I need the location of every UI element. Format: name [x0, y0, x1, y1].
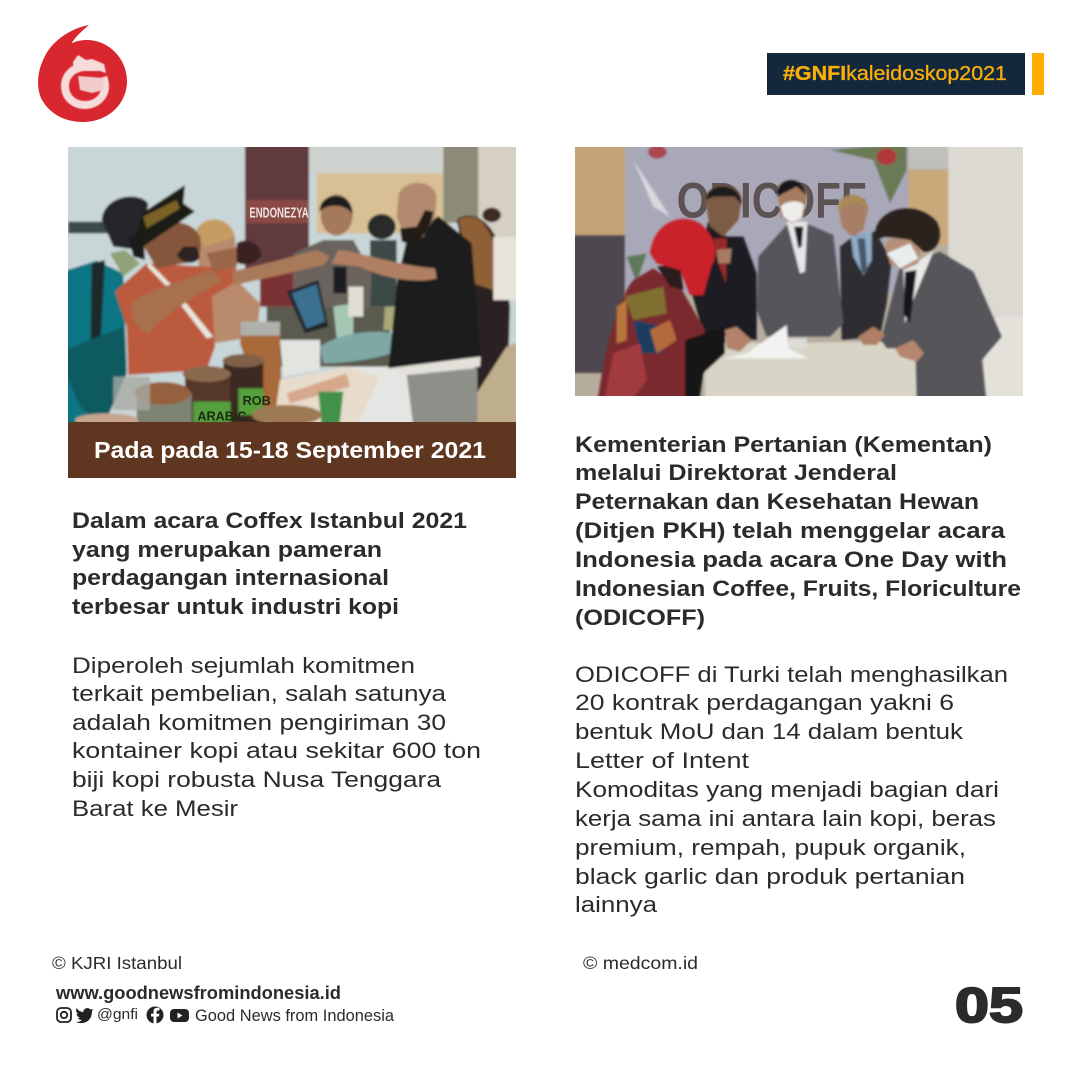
- right body: 20 kontrak perdagangan yakni 6: [575, 690, 954, 715]
- right heading: Indonesia pada acara One Day with: [575, 547, 1007, 572]
- right heading: Kementerian Pertanian (Kementan): [575, 432, 992, 457]
- photo credit right: © medcom.id: [583, 953, 698, 973]
- photo credit left: © KJRI Istanbul: [52, 953, 182, 973]
- photo: ODICOFF signing ceremony: [575, 147, 1023, 396]
- left body: kontainer kopi atau sekitar 600 ton: [72, 738, 481, 763]
- left body: [72, 653, 481, 821]
- left body: adalah komitmen pengiriman 30: [72, 710, 446, 735]
- right heading: melalui Direktorat Jenderal: [575, 460, 897, 485]
- right body: black garlic dan produk pertanian: [575, 864, 965, 889]
- photo: ODICOFF signing ceremony: ODICOFF: [677, 172, 867, 228]
- social row: [57, 1006, 395, 1025]
- hashtag badge: [767, 53, 1025, 95]
- accent bar: [1032, 53, 1044, 95]
- photo: coffee expo booth: ARABIC: [197, 410, 247, 424]
- right body: bentuk MoU dan 14 dalam bentuk: [575, 719, 964, 744]
- date banner: Pada pada 15-18 September 2021: [94, 437, 486, 463]
- page number: 05: [955, 979, 1023, 1033]
- left body: terkait pembelian, salah satunya: [72, 681, 447, 706]
- left heading: perdagangan internasional: [72, 565, 389, 590]
- right heading: [575, 432, 1021, 630]
- right body: Letter of Intent: [575, 748, 750, 773]
- right heading: (ODICOFF): [575, 605, 705, 630]
- icon: youtube: [170, 1009, 189, 1022]
- left heading: Dalam acara Coffex Istanbul 2021: [72, 508, 467, 533]
- icon: twitter: [76, 1008, 93, 1023]
- page name: Good News from Indonesia: [195, 1006, 395, 1025]
- left body: biji kopi robusta Nusa Tenggara: [72, 767, 442, 792]
- photo: coffee expo booth: ENDONEZYA: [249, 205, 309, 221]
- right heading: Peternakan dan Kesehatan Hewan: [575, 489, 979, 514]
- icon: facebook: [146, 1006, 164, 1024]
- icon: instagram: [57, 1008, 71, 1022]
- right heading: Indonesian Coffee, Fruits, Floriculture: [575, 576, 1021, 601]
- left body: Diperoleh sejumlah komitmen: [72, 653, 415, 678]
- left heading: terbesar untuk industri kopi: [72, 594, 399, 619]
- right body: [575, 662, 1008, 917]
- website url: www.goodnewsfromindonesia.id: [55, 983, 341, 1003]
- right body: kerja sama ini antara lain kopi, beras: [575, 806, 996, 831]
- right column text: [575, 432, 1021, 917]
- logo: GNFI red six with garuda G: [38, 25, 127, 122]
- left heading: [72, 508, 467, 619]
- photo: coffee expo booth: ROB: [243, 394, 271, 408]
- left column text: [72, 508, 481, 821]
- left body: Barat ke Mesir: [72, 796, 239, 821]
- right body: premium, rempah, pupuk organik,: [575, 835, 966, 860]
- handle: @gnfi: [97, 1006, 138, 1023]
- right body: Komoditas yang menjadi bagian dari: [575, 777, 999, 802]
- hashtag badge: #GNFIkaleidoskop2021: [783, 63, 1007, 85]
- right body: lainnya: [575, 892, 658, 917]
- left heading: yang merupakan pameran: [72, 537, 382, 562]
- right heading: (Ditjen PKH) telah menggelar acara: [575, 518, 1006, 543]
- right body: ODICOFF di Turki telah menghasilkan: [575, 662, 1008, 687]
- photo: coffee expo booth: [68, 147, 516, 422]
- date banner: [68, 422, 516, 478]
